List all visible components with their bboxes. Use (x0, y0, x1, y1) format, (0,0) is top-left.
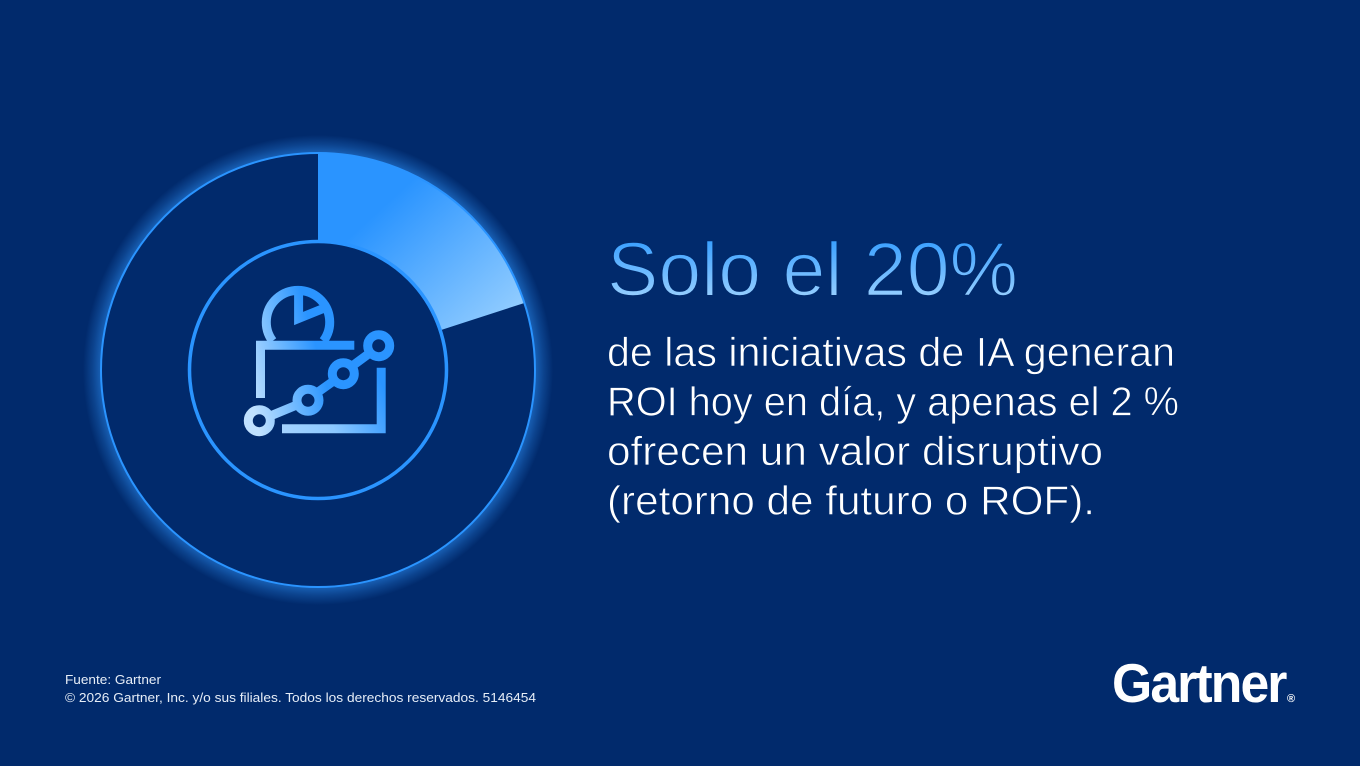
icon: chart frame left (260, 345, 354, 398)
Gartner logo: Gartner (1112, 654, 1287, 714)
icon: pie clock and growth chart (248, 290, 390, 432)
inner ring (190, 242, 446, 498)
source and copyright: Fuente: Gartner (65, 672, 162, 687)
body text: de las iniciativas de IA generan (607, 329, 1175, 375)
source and copyright (65, 672, 536, 705)
icon: trend line with nodes (248, 335, 390, 432)
source and copyright: © 2026 Gartner, Inc. y/o sus filiales. Todos los derechos reservados. 5146454 (65, 690, 536, 705)
body text: (retorno de futuro o ROF). (607, 478, 1095, 524)
outer glow (83, 135, 553, 605)
heading: Solo el 20% (607, 228, 1018, 312)
donut base (101, 153, 535, 587)
body text: ofrecen un valor disruptivo (607, 428, 1103, 474)
donut chart: 20% (83, 135, 553, 605)
body text (607, 329, 1179, 524)
body text: ROI hoy en día, y apenas el 2 % (607, 378, 1179, 424)
highlighted 20% segment (318, 153, 524, 330)
icon: chart frame right (282, 368, 381, 429)
outer ring (101, 153, 535, 587)
Gartner logo: ® (1287, 693, 1295, 705)
icon: pie dial (266, 290, 330, 341)
